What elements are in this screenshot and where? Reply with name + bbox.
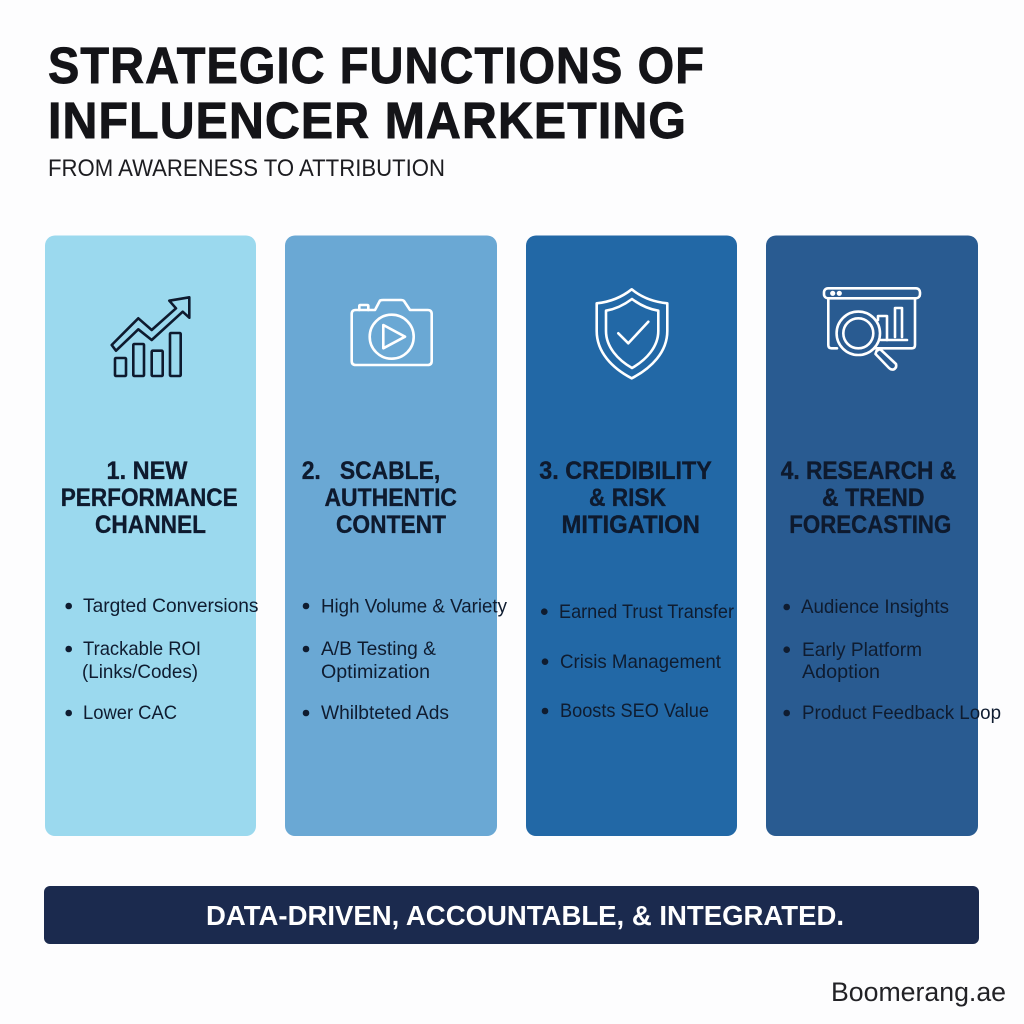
subtitle: FROM AWARENESS TO ATTRIBUTION [48,155,445,182]
heading: new performance channel: 1. NEW [106,457,188,485]
heading: credibility and risk mitigation [539,457,712,539]
list: credibility bullets [541,601,734,722]
heading: research and trend forecasting: FORECASTING [789,511,951,539]
title: STRATEGIC FUNCTIONS OF [48,37,705,94]
list: content bullets: Optimization [321,661,430,683]
heading: new performance channel [61,457,238,539]
heading: scalable authentic content: CONTENT [336,511,446,539]
heading: credibility and risk mitigation: & RISK [589,484,666,512]
list: credibility bullets: Crisis Management [560,651,722,673]
heading: new performance channel: PERFORMANCE [61,484,238,512]
title: INFLUENCER MARKETING [48,92,687,149]
banner text: DATA-DRIVEN, ACCOUNTABLE, & INTEGRATED. [206,900,844,931]
list: research bullets: Early Platform [802,639,922,661]
icon: video camera [352,300,432,365]
list: research bullets: Audience Insights [801,596,949,618]
title [48,37,705,149]
panel: new performance channel [45,236,259,836]
list: research bullets [783,596,1001,724]
list: performance bullets: Lower CAC [83,702,177,724]
icon: browser with magnifier [824,288,920,370]
banner [44,886,979,944]
heading: credibility and risk mitigation: 3. CREDIBILITY [539,457,712,485]
list: credibility bullets: Boosts SEO Value [560,700,709,722]
list: content bullets: A/B Testing & [321,638,436,660]
list: credibility bullets: Earned Trust Transfer [559,601,734,623]
heading: scalable authentic content: AUTHENTIC [324,484,457,512]
list: research bullets: Product Feedback Loop [802,702,1001,724]
icon: growth chart [112,297,189,376]
list: content bullets: High Volume & Variety [321,596,507,618]
heading: scalable authentic content [302,457,457,539]
panel: research and trend forecasting [766,236,1001,836]
heading: research and trend forecasting: & TREND [822,484,924,512]
heading: new performance channel: CHANNEL [95,511,206,539]
list: research bullets: Adoption [802,661,880,683]
list: performance bullets: Trackable ROI [83,638,201,660]
panel: credibility and risk mitigation [526,236,737,836]
list: content bullets [303,596,507,724]
panel: scalable authentic content [285,236,507,836]
heading: credibility and risk mitigation: MITIGATION [562,511,700,539]
heading: research and trend forecasting: 4. RESEARCH & [781,457,956,485]
list: content bullets: Whilbteted Ads [321,702,449,724]
heading: research and trend forecasting [781,457,956,539]
heading: scalable authentic content: 2. SCABLE, [302,457,440,485]
list: performance bullets: (Links/Codes) [82,661,198,683]
brand mark: Boomerang.ae [831,977,1006,1007]
icon: shield with check [597,289,667,378]
list: performance bullets [65,595,259,724]
list: performance bullets: Targted Conversions [83,595,259,617]
